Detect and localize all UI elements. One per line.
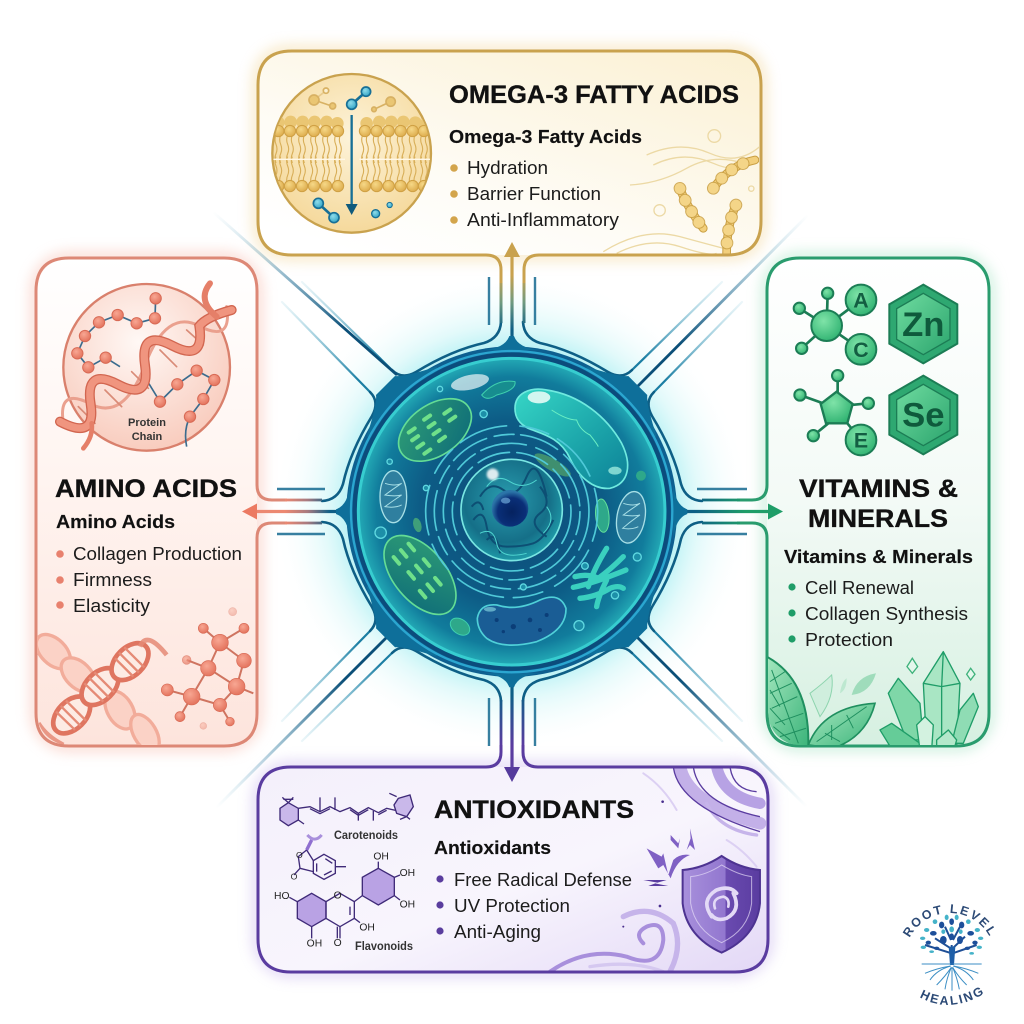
subheading: vitamins and minerals: Vitamins & Minerals — [784, 547, 973, 567]
organelle: nucleus — [461, 459, 562, 561]
icons: vitamin molecules and mineral hexagons: Se — [902, 396, 945, 434]
organelle: upper chloroplast — [387, 386, 483, 474]
organelle: endoplasmic reticulum — [426, 426, 598, 598]
logo icon: tree — [920, 915, 983, 991]
icon: carotenoid and flavonoid molecules: OH — [373, 851, 389, 862]
icon: carotenoid and flavonoid molecules: OH — [307, 939, 322, 950]
organelle: mitochondria — [380, 471, 649, 545]
connector lines from cell to outer space — [213, 212, 808, 808]
subheading: antioxidants: Antioxidants — [434, 838, 551, 858]
bullet list: antioxidant benefits: UV Protection — [454, 896, 570, 916]
illustration: DNA and molecule — [30, 608, 253, 757]
label: protein chain: Chain — [132, 431, 163, 443]
bullet list: vitamin benefits: Collagen Synthesis — [805, 604, 968, 624]
label: flavonoids: Flavonoids — [355, 941, 413, 953]
label: protein chain — [128, 417, 166, 443]
bullet list: amino benefits — [56, 544, 242, 616]
bullet list: amino benefits: Firmness — [73, 570, 152, 590]
icons: vitamin molecules and mineral hexagons — [794, 285, 957, 455]
logo text: arc: HEALING — [920, 988, 983, 1005]
bullet list: amino benefits: Collagen Production — [73, 544, 242, 564]
icons: vitamin molecules and mineral hexagons: C — [853, 338, 869, 362]
bullet list: vitamin benefits — [788, 578, 968, 650]
icon: protein chain circle — [60, 283, 232, 451]
organelle: bottom vacuole — [477, 597, 566, 645]
panel: vitamins and minerals — [680, 258, 989, 752]
label: carotenoids: Carotenoids — [334, 830, 398, 842]
decorative waves and fatty chains — [603, 130, 763, 254]
icon: carotenoid and flavonoid molecules — [274, 793, 415, 950]
icon: carotenoid and flavonoid molecules: O — [334, 938, 342, 949]
bullet list: omega-3 benefits — [450, 158, 619, 230]
arrow: to vitamins and minerals — [680, 504, 783, 520]
organelle: large teal vacuole — [515, 389, 628, 488]
icon: carotenoid and flavonoid molecules: O — [291, 871, 298, 881]
icons: vitamin molecules and mineral hexagons: A — [853, 289, 869, 313]
icon: shield with lightning — [643, 828, 760, 953]
bullet list: antioxidant benefits: Free Radical Defense — [454, 870, 632, 890]
icon: carotenoid and flavonoid molecules: O — [334, 890, 342, 901]
organelle: lower chloroplast — [370, 523, 470, 627]
illustration: purple swirls and lightning — [550, 767, 760, 972]
organelle: small green bodies — [412, 381, 646, 639]
arrow: to amino acids — [242, 504, 345, 520]
highlights and vesicles — [375, 371, 641, 631]
icon: carotenoid and flavonoid molecules: HO — [274, 891, 289, 902]
bullet list: omega-3 benefits: Barrier Function — [467, 184, 601, 204]
logo text: arc: ROOT LEVEL — [902, 904, 994, 938]
icon: carotenoid and flavonoid molecules: OH — [400, 868, 415, 879]
heading: vitamins and minerals — [799, 475, 958, 533]
icons: vitamin molecules and mineral hexagons: Zn — [902, 306, 944, 344]
icons: vitamin molecules and mineral hexagons: E — [854, 429, 868, 453]
subheading: amino acids: Amino Acids — [56, 512, 175, 532]
icon: cell membrane diagram — [272, 74, 433, 233]
bullet list: amino benefits: Elasticity — [73, 596, 150, 616]
label: protein chain: Protein — [128, 417, 166, 429]
panel: amino acids — [30, 258, 345, 757]
heading: amino acids: AMINO ACIDS — [55, 475, 237, 503]
icon: carotenoid and flavonoid molecules: OH — [400, 899, 415, 910]
arrow: to omega-3 — [504, 242, 520, 345]
heading: vitamins and minerals: VITAMINS & — [799, 475, 958, 503]
panel: omega-3 fatty acids — [258, 51, 763, 323]
central illustration: skin cell — [336, 336, 687, 687]
logo text: arc — [902, 904, 994, 1005]
bullet list: antioxidant benefits — [436, 870, 632, 942]
illustration: leaves and crystals — [765, 652, 978, 752]
bullet list: antioxidant benefits: Anti-Aging — [454, 922, 541, 942]
icon: carotenoid and flavonoid molecules: O — [296, 850, 303, 860]
bullet list: omega-3 benefits: Anti-Inflammatory — [467, 210, 619, 230]
background: cyan glow behind cell — [272, 271, 752, 751]
heading: antioxidants: ANTIOXIDANTS — [434, 796, 634, 824]
bullet list: vitamin benefits: Cell Renewal — [805, 578, 914, 598]
panel: antioxidants — [258, 680, 768, 972]
arrow: to antioxidants — [504, 680, 520, 782]
organelle: golgi apparatus — [573, 548, 626, 607]
bullet list: omega-3 benefits: Hydration — [467, 158, 548, 178]
heading: omega-3: OMEGA-3 FATTY ACIDS — [449, 81, 739, 109]
icon: carotenoid and flavonoid molecules: OH — [359, 923, 375, 934]
logo: Root Level Healing — [902, 904, 994, 1005]
bullet list: vitamin benefits: Protection — [805, 630, 893, 650]
heading: vitamins and minerals: MINERALS — [808, 505, 948, 533]
cell membrane — [336, 336, 687, 687]
subheading: omega-3: Omega-3 Fatty Acids — [449, 127, 642, 147]
